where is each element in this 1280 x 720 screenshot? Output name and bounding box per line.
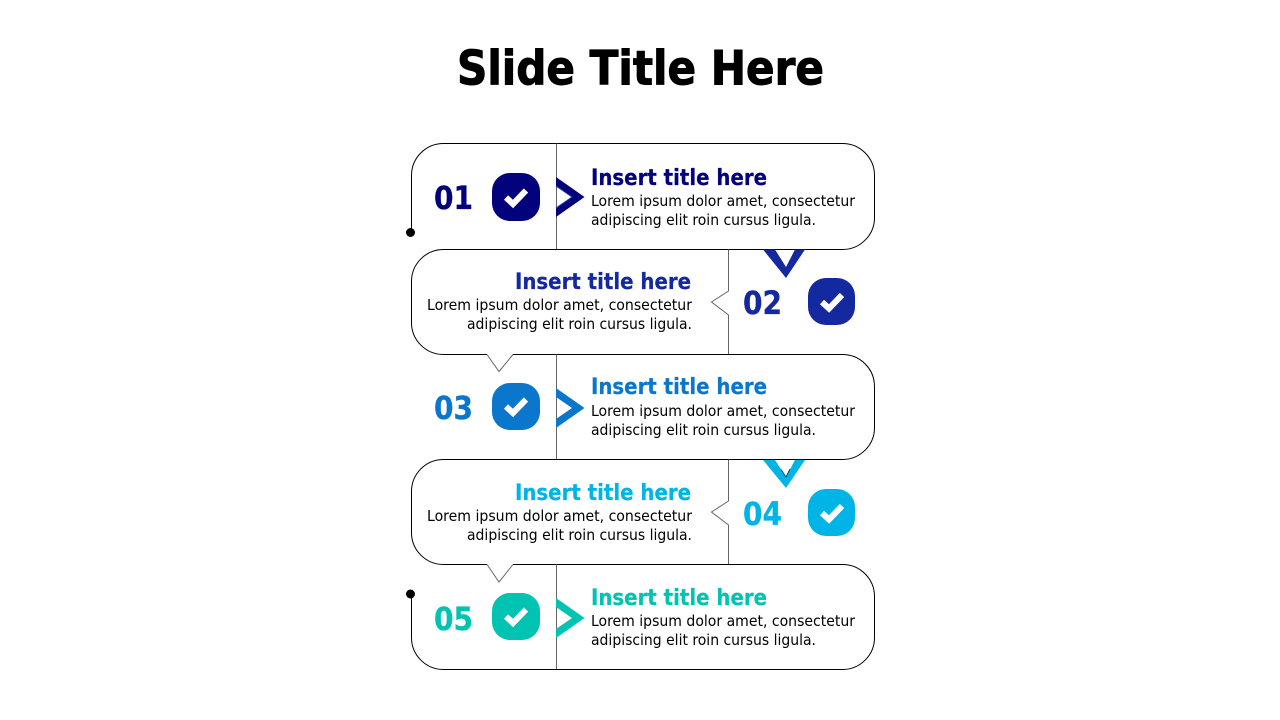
panel outline 03 <box>443 354 875 460</box>
title: Slide Title Here <box>457 42 824 96</box>
number 01: 01 <box>434 179 473 217</box>
body text 04: Lorem ipsum dolor amet, consectetur <box>427 507 692 525</box>
heading 03: Insert title here <box>591 374 767 400</box>
divider 05 <box>556 564 558 669</box>
panel outline 05 <box>411 564 875 670</box>
body text 04 <box>427 507 692 544</box>
body text 05: Lorem ipsum dolor amet, consectetur <box>591 612 855 630</box>
body text 02: adipiscing elit roin cursus ligula. <box>467 315 692 333</box>
divider 03 <box>556 354 558 459</box>
pointer down 04 <box>487 564 513 582</box>
pointer down 02 <box>487 354 513 372</box>
body text 03 <box>591 402 855 439</box>
heading 02: Insert title here <box>515 269 691 295</box>
panel: step 04 <box>411 460 855 582</box>
panel outline 04 <box>411 460 842 564</box>
body text 02: Lorem ipsum dolor amet, consectetur <box>427 296 692 314</box>
body text 03: adipiscing elit roin cursus ligula. <box>591 421 816 439</box>
heading 01: Insert title here <box>591 165 767 191</box>
heading 04: Insert title here <box>515 480 691 506</box>
connector dot top <box>406 228 415 237</box>
body text 05 <box>591 612 855 649</box>
panel: step 03 <box>434 354 875 460</box>
body text 01: Lorem ipsum dolor amet, consectetur <box>591 192 855 210</box>
number 05: 05 <box>434 600 473 638</box>
body text 03: Lorem ipsum dolor amet, consectetur <box>591 402 855 420</box>
chevron 04 <box>763 460 805 488</box>
divider with notch 04 <box>712 460 728 564</box>
panel outline 01 <box>412 144 875 250</box>
body text 02 <box>427 296 692 333</box>
icon: check badge 03 <box>492 383 540 430</box>
body text 01: adipiscing elit roin cursus ligula. <box>591 211 816 229</box>
heading 05: Insert title here <box>591 585 767 611</box>
divider with notch 02 <box>712 250 728 354</box>
connector dot bottom <box>406 590 415 598</box>
chevron 02 <box>763 250 805 278</box>
chevron 01 <box>556 177 584 217</box>
icon: check badge 02 <box>808 278 855 325</box>
icon: check badge 01 <box>492 173 540 221</box>
chevron 05 <box>556 598 584 638</box>
panel: step 02 <box>411 250 855 372</box>
panel: step 05 <box>406 564 875 670</box>
divider 01 <box>556 144 558 249</box>
icon: check badge 05 <box>492 593 540 640</box>
panel outline 02 <box>411 250 842 354</box>
number 02: 02 <box>743 284 782 322</box>
body text 05: adipiscing elit roin cursus ligula. <box>591 631 816 649</box>
number 04: 04 <box>743 495 782 533</box>
body text 01 <box>591 192 855 229</box>
number 03: 03 <box>434 389 473 427</box>
panel: step 01 <box>406 144 875 250</box>
body text 04: adipiscing elit roin cursus ligula. <box>467 526 692 544</box>
chevron 03 <box>556 388 584 428</box>
icon: check badge 04 <box>808 489 855 536</box>
